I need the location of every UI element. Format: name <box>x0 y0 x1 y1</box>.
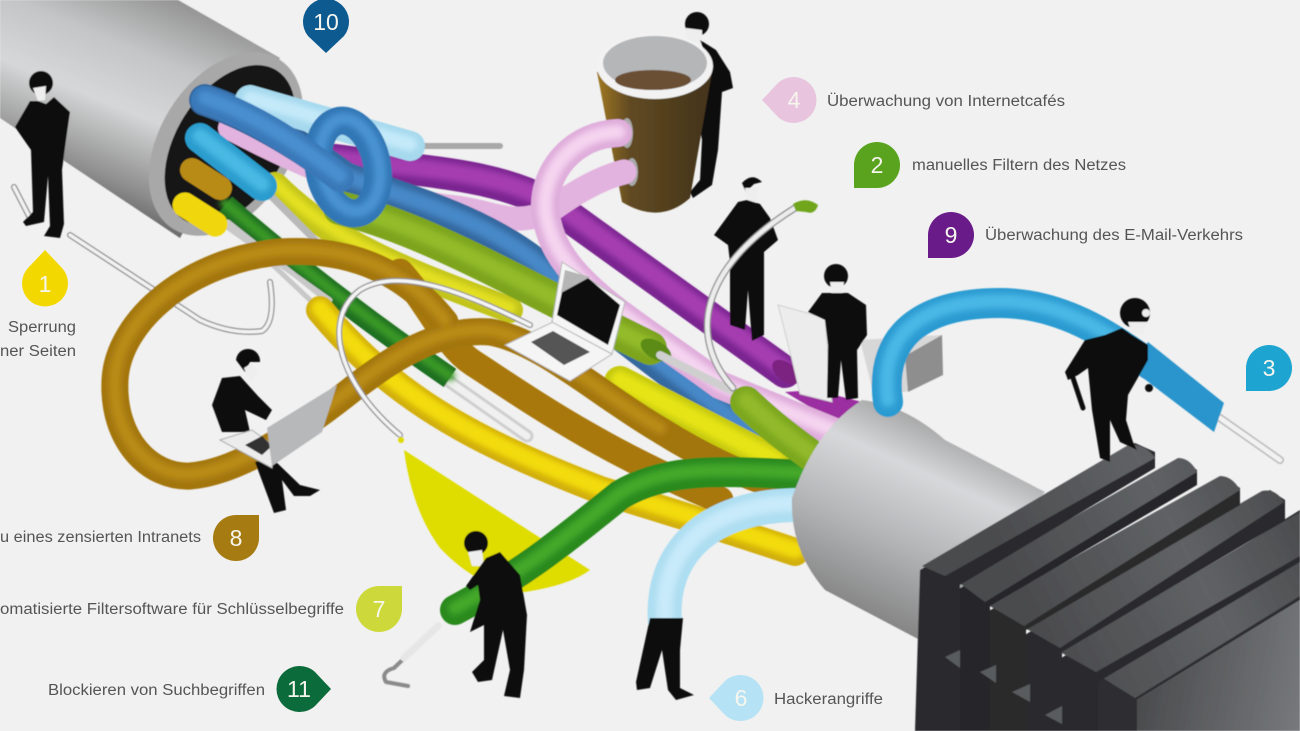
left grey pipe <box>0 0 335 264</box>
person: sitting with laptop <box>212 349 320 513</box>
marker 4 with label: Überwachung von Internetcafés <box>827 92 1065 110</box>
marker 1 with label: ner Seiten <box>0 343 76 360</box>
person: hacker on connector <box>1065 298 1153 462</box>
cyan arched cable with wire <box>887 301 1280 460</box>
marker 8 with label: 8 <box>230 525 242 551</box>
white paper and grey box <box>778 305 943 402</box>
marker 8 with label: u eines zensierten Intranets <box>0 529 201 546</box>
marker 3: 3 <box>1263 355 1275 381</box>
marker 7 with label: 7 <box>373 596 385 622</box>
marker 4 with label: 4 <box>788 87 801 113</box>
marker 3 <box>1246 345 1292 391</box>
marker 1 with label: Sperrung <box>8 319 76 336</box>
white wire loop <box>339 281 530 443</box>
fin 1 <box>915 443 1155 731</box>
marker 11 with label: 11 <box>287 676 311 702</box>
notches <box>945 650 1062 724</box>
laptop: grey by sitting person <box>220 385 337 468</box>
person: standing by left pipe <box>15 71 70 238</box>
brown and yellow stubs <box>185 170 220 224</box>
marker 8 with label <box>0 515 259 561</box>
white cable with green tip <box>707 200 818 388</box>
right grey pipe <box>792 400 1045 640</box>
fin 2 <box>957 458 1197 731</box>
person: reading paper <box>808 264 867 400</box>
marker 11 with label <box>48 666 331 712</box>
marker 11 with label: Blockieren von Suchbegriffen <box>48 682 265 699</box>
pink cable from pipe <box>230 128 540 219</box>
fin 3 <box>987 476 1240 731</box>
yellow cable <box>320 308 795 552</box>
marker 10 <box>303 0 349 53</box>
marker 2 with label <box>854 142 1126 188</box>
marker 6 with label: 6 <box>735 685 747 711</box>
person: holding coffee cup <box>685 12 733 198</box>
person: hunched over green cable <box>464 531 527 698</box>
marker 9 with label: Überwachung des E-Mail-Verkehrs <box>985 226 1243 244</box>
coffee cup <box>597 33 713 213</box>
marker 9 with label: 9 <box>945 222 957 248</box>
green hooked cable <box>384 470 810 686</box>
fin 6 <box>1095 558 1300 731</box>
yellow-lime cable stub <box>620 380 775 462</box>
laptop: white on cables <box>505 262 625 381</box>
white wire to olive cable <box>660 355 730 390</box>
dark-green cable <box>225 203 527 436</box>
cyan stub with wire <box>200 136 315 240</box>
brown cables <box>115 249 790 500</box>
person: holding white cable <box>714 177 778 341</box>
marker 1 with label <box>0 250 76 360</box>
marker 10: 10 <box>313 9 339 35</box>
olive-green cable <box>340 206 675 366</box>
purple cable <box>335 158 862 424</box>
fin 5 <box>1058 510 1300 731</box>
olive-yellow cable <box>275 183 510 310</box>
marker 7 with label: omatisierte Filtersoftware für Schlüsselbegriffe <box>0 601 344 618</box>
marker 7 with label <box>0 586 402 632</box>
marker 2 with label: 2 <box>871 152 883 178</box>
light-blue cable with wire <box>250 98 500 146</box>
dark-blue cable <box>205 98 775 455</box>
marker 2 with label: manuelles Filtern des Netzes <box>912 157 1126 174</box>
marker 6 with label <box>709 675 883 721</box>
wire bundle <box>220 222 330 300</box>
pink cables entering cup <box>545 132 835 432</box>
blue knot ring <box>205 98 388 219</box>
fin 4 <box>1023 490 1285 731</box>
olive cable stub <box>746 400 815 458</box>
light-blue lower cable <box>665 503 800 622</box>
yellow light cone <box>404 450 590 592</box>
black connector <box>915 443 1300 731</box>
marker 4 with label <box>762 77 1065 123</box>
marker 1 with label: 1 <box>39 271 51 297</box>
person: legs under light-blue cable <box>636 618 694 700</box>
grey wire on the floor <box>14 187 272 332</box>
marker 6 with label: Hackerangriffe <box>774 691 883 708</box>
marker 9 with label <box>928 212 1243 258</box>
